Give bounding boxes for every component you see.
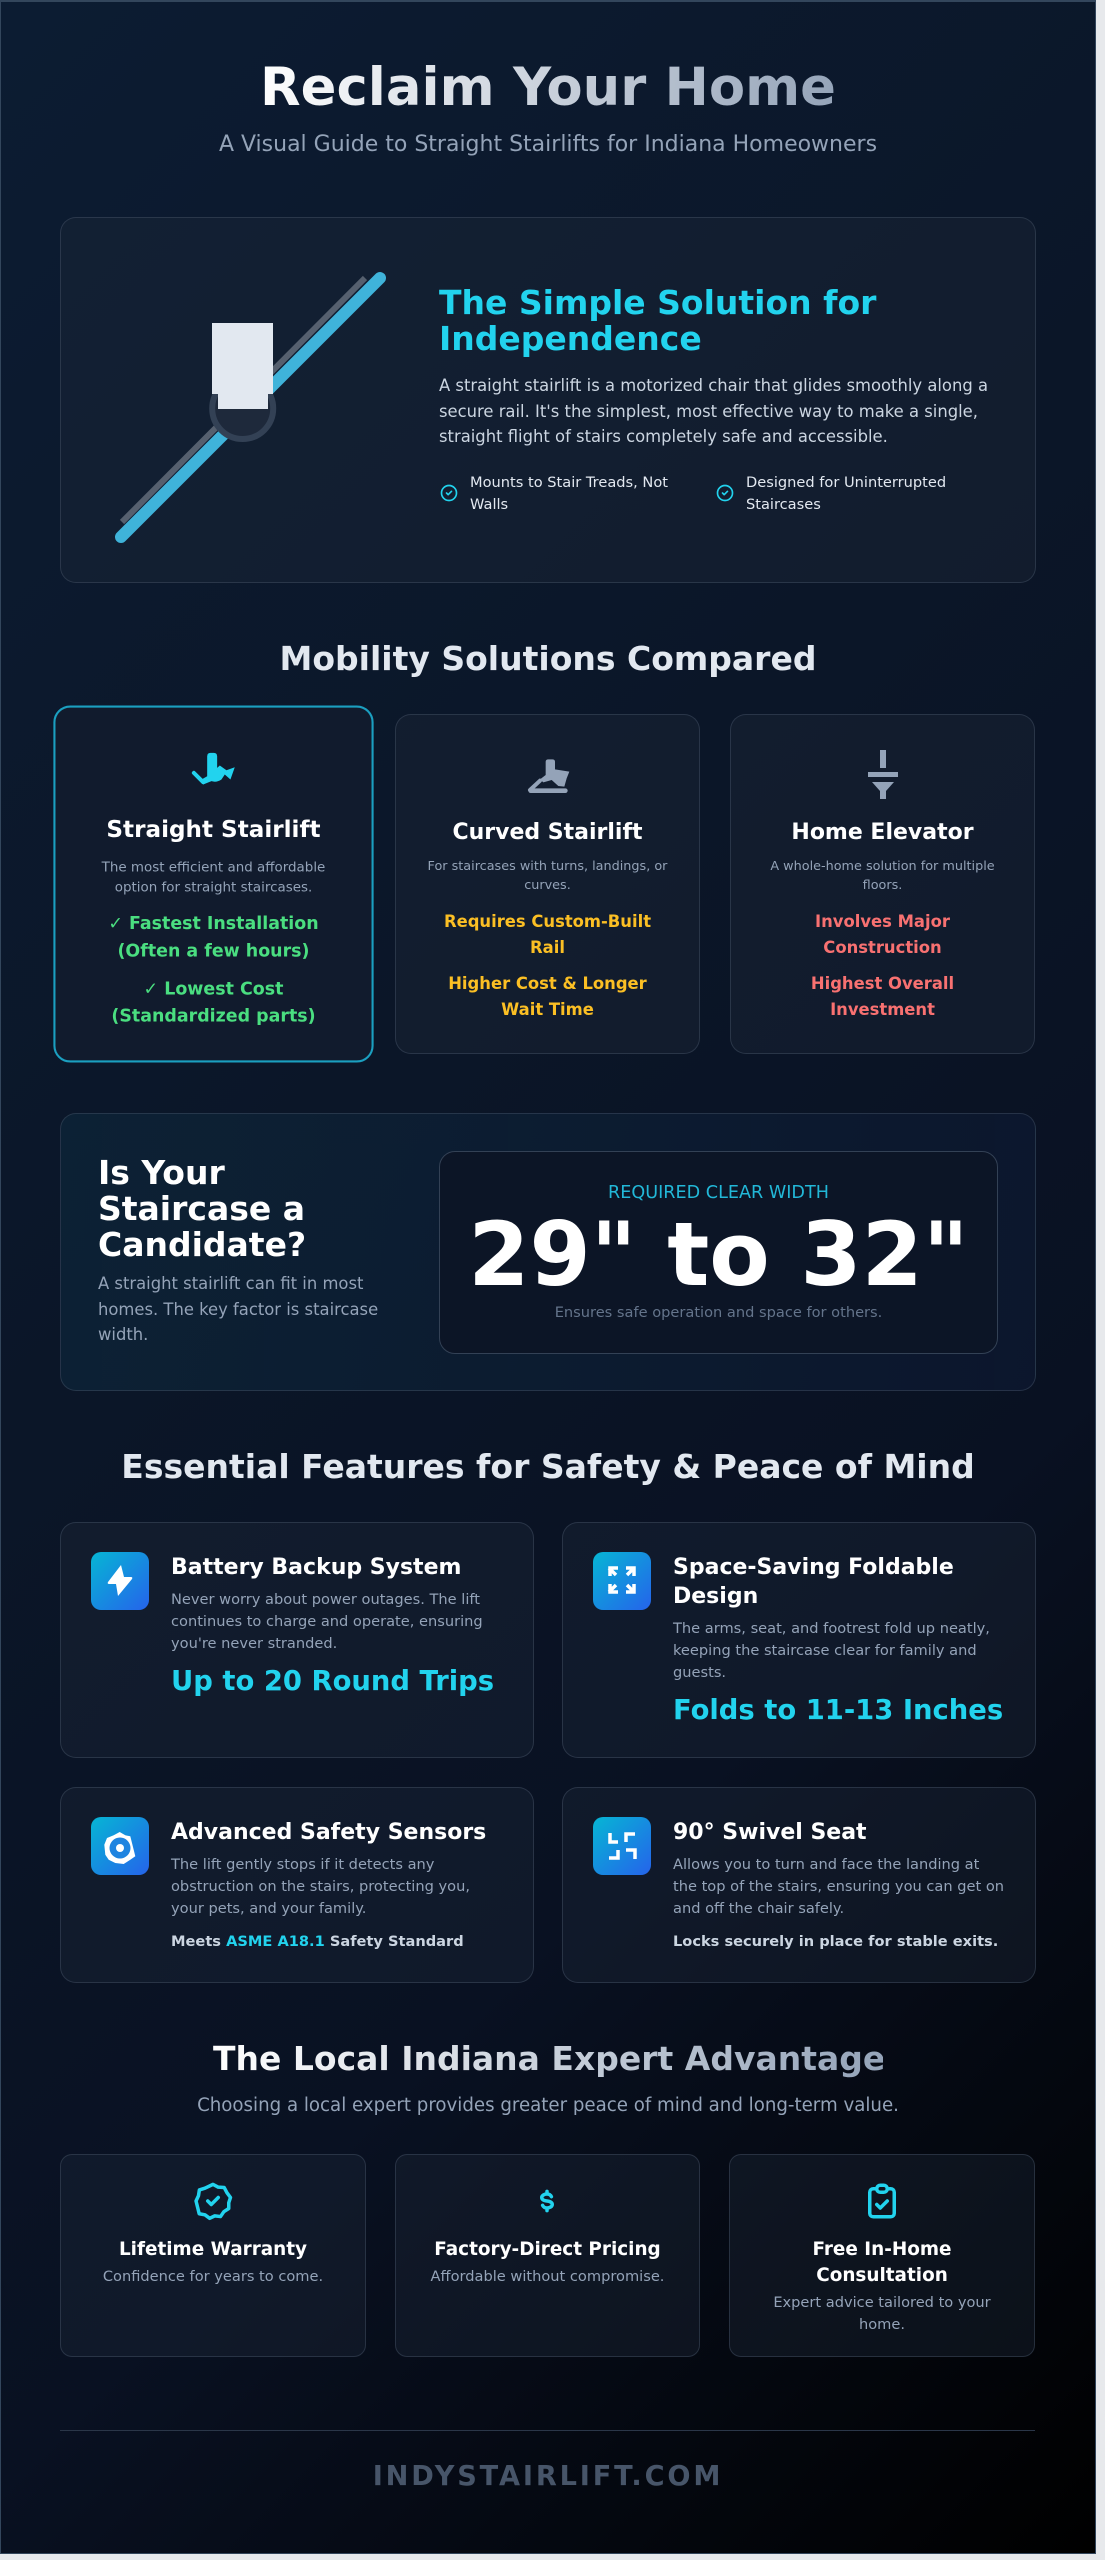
card description — [102, 860, 325, 896]
safety standard note: Meets ASME A18.1 Safety Standard — [171, 1933, 464, 1950]
icon: dollar — [540, 2190, 554, 2212]
panel: swivel seat — [562, 1787, 1036, 1983]
candidate heading — [98, 1153, 306, 1264]
candidate heading: Staircase a — [98, 1189, 305, 1228]
feature description — [672, 1620, 990, 1681]
benefit: cost — [111, 978, 316, 1025]
feature title: Advanced Safety Sensors — [171, 1820, 486, 1845]
panel: straight stairlift — [53, 706, 374, 1062]
card title: Straight Stairlift — [106, 817, 321, 843]
feature description: you're never stranded. — [171, 1635, 337, 1652]
panel: factory direct — [395, 2154, 700, 2357]
feature description: guests. — [673, 1664, 726, 1681]
drawback: custom rail: Requires Custom-Built — [444, 912, 651, 931]
feature description — [673, 1856, 1004, 1917]
drawback: construction — [815, 912, 950, 957]
card description: floors. — [863, 878, 902, 893]
benefit title: Lifetime Warranty — [119, 2239, 307, 2260]
label: REQUIRED CLEAR WIDTH — [608, 1183, 829, 1203]
benefit description: home. — [859, 2316, 905, 2333]
drawback: investment: Investment — [830, 1000, 935, 1019]
feature: uninterrupted — [746, 474, 946, 513]
benefit description: Confidence for years to come. — [103, 2268, 323, 2285]
hero description: secure rail. It's the simplest, most effective way to make a single, — [439, 402, 978, 421]
benefit: cost: (Standardized parts) — [111, 1005, 316, 1025]
benefit: installation: (Often a few hours) — [117, 940, 310, 960]
icon: curved stairs — [528, 759, 570, 793]
metric: Up to 20 Round Trips — [171, 1666, 494, 1697]
card description: For staircases with turns, landings, or — [428, 859, 667, 874]
hero description: A straight stairlift is a motorized chair that glides smoothly along a — [439, 376, 988, 395]
benefit description — [773, 2294, 991, 2333]
feature title — [673, 1555, 954, 1609]
benefit description: Expert advice tailored to your — [773, 2294, 991, 2311]
drawback: construction: Involves Major — [815, 912, 950, 931]
feature description: The lift gently stops if it detects any — [171, 1856, 434, 1873]
feature description: The arms, seat, and footrest fold up neatly, — [673, 1620, 990, 1637]
icon: lightning bolt — [90, 1552, 148, 1610]
card description — [428, 859, 668, 893]
card description: A whole-home solution for multiple — [770, 859, 995, 874]
metric: Folds to 11-13 Inches — [673, 1695, 1003, 1726]
panel: free consultation — [729, 2154, 1035, 2357]
candidate description: homes. The key factor is staircase — [98, 1300, 378, 1319]
icon: elevator — [868, 750, 898, 799]
icon: check circle 2 — [716, 484, 734, 502]
panel: safety sensors — [60, 1787, 534, 1983]
drawback: cost — [448, 974, 647, 1019]
feature title: Design — [673, 1584, 758, 1609]
card description: curves. — [524, 878, 571, 893]
icon: collapse corners — [593, 1817, 651, 1875]
subheading: Choosing a local expert provides greater peace of mind and long-term value. — [197, 2095, 899, 2116]
candidate heading: Candidate? — [98, 1225, 306, 1264]
feature title: Battery Backup System — [171, 1555, 461, 1580]
box: required width — [439, 1151, 998, 1354]
panel: foldable design — [562, 1522, 1036, 1758]
feature: mounts — [470, 474, 668, 513]
benefit title: Consultation — [816, 2265, 948, 2286]
benefit: installation — [108, 913, 319, 960]
card description: option for straight staircases. — [115, 880, 312, 896]
feature description: the top of the stairs, ensuring you can get on — [673, 1878, 1004, 1895]
footer brand: INDYSTAIRLIFT.COM — [373, 2461, 723, 2492]
feature description: Allows you to turn and face the landing at — [673, 1856, 979, 1873]
benefit title: Free In-Home — [812, 2239, 952, 2260]
drawback: investment — [811, 974, 954, 1019]
panel: battery backup — [60, 1522, 534, 1758]
feature description — [171, 1591, 483, 1652]
icon: clipboard check — [868, 2184, 896, 2218]
icon: expand arrows — [593, 1552, 651, 1610]
card description: The most efficient and affordable — [102, 860, 325, 876]
feature description: Never worry about power outages. The lift — [171, 1591, 480, 1608]
feature: mounts: Walls — [470, 496, 508, 513]
icon: check circle 1 — [440, 484, 458, 502]
drawback: custom rail — [444, 912, 651, 957]
icon: straight stairs — [192, 752, 235, 784]
feature description: and off the chair safely. — [673, 1900, 844, 1917]
panel: staircase candidate — [60, 1113, 1036, 1391]
hero description — [439, 376, 988, 446]
drawback: cost: Higher Cost & Longer — [448, 974, 647, 993]
benefit: cost: ✓ Lowest Cost — [144, 978, 283, 998]
exit note: Locks securely in place for stable exits. — [673, 1933, 998, 1950]
benefit description: Affordable without compromise. — [431, 2268, 664, 2285]
drawback: construction: Construction — [823, 938, 942, 957]
hero heading: The Simple Solution for — [439, 283, 876, 322]
icon: badge check — [194, 2182, 232, 2220]
card title: Curved Stairlift — [452, 820, 643, 845]
note: Ensures safe operation and space for others. — [555, 1304, 882, 1321]
candidate heading: Is Your — [98, 1153, 225, 1192]
benefit title: Factory-Direct Pricing — [434, 2239, 661, 2260]
drawback: custom rail: Rail — [530, 938, 565, 957]
hero heading — [439, 283, 876, 358]
feature title: 90° Swivel Seat — [673, 1820, 867, 1845]
panel: home elevator — [730, 714, 1035, 1054]
feature title: Space-Saving Foldable — [673, 1555, 954, 1580]
hero heading: Independence — [439, 319, 702, 358]
feature description: keeping the staircase clear for family and — [673, 1642, 977, 1659]
candidate description: width. — [98, 1325, 148, 1344]
hero description: straight flight of stairs completely safe and accessible. — [439, 427, 888, 446]
big number: 29" to 32" — [468, 1203, 969, 1306]
candidate description — [98, 1274, 378, 1344]
panel: lifetime warranty — [60, 2154, 366, 2357]
title: Reclaim Your Home — [260, 57, 836, 118]
icon: sensor — [90, 1817, 148, 1875]
heading: mobility solutions: Mobility Solutions Compared — [280, 639, 816, 678]
feature description: your pets, and your family. — [171, 1900, 366, 1917]
benefit: installation: ✓ Fastest Installation — [108, 913, 319, 933]
footer rule — [60, 2430, 1035, 2431]
illustration: straight stairlift — [115, 272, 386, 543]
drawback: investment: Highest Overall — [811, 974, 954, 993]
candidate description: A straight stairlift can fit in most — [98, 1274, 363, 1293]
benefit title — [812, 2239, 952, 2286]
panel: simple solution hero — [60, 217, 1036, 583]
drawback: cost: Wait Time — [501, 1000, 594, 1019]
feature description: continues to charge and operate, ensuring — [171, 1613, 483, 1630]
card description — [770, 859, 995, 893]
panel: curved stairlift — [395, 714, 700, 1054]
card title: Home Elevator — [791, 820, 974, 845]
feature: mounts: Mounts to Stair Treads, Not — [470, 474, 668, 491]
feature: uninterrupted: Designed for Uninterrupted — [746, 474, 946, 491]
heading: essential features: Essential Features for Safety & Peace of Mind — [121, 1447, 975, 1486]
feature description — [170, 1856, 470, 1917]
feature: uninterrupted: Staircases — [746, 496, 821, 513]
feature description: obstruction on the stairs, protecting you, — [171, 1878, 470, 1895]
heading: local expert: The Local Indiana Expert Advantage — [213, 2039, 885, 2078]
subtitle: A Visual Guide to Straight Stairlifts for Indiana Homeowners — [219, 132, 877, 157]
